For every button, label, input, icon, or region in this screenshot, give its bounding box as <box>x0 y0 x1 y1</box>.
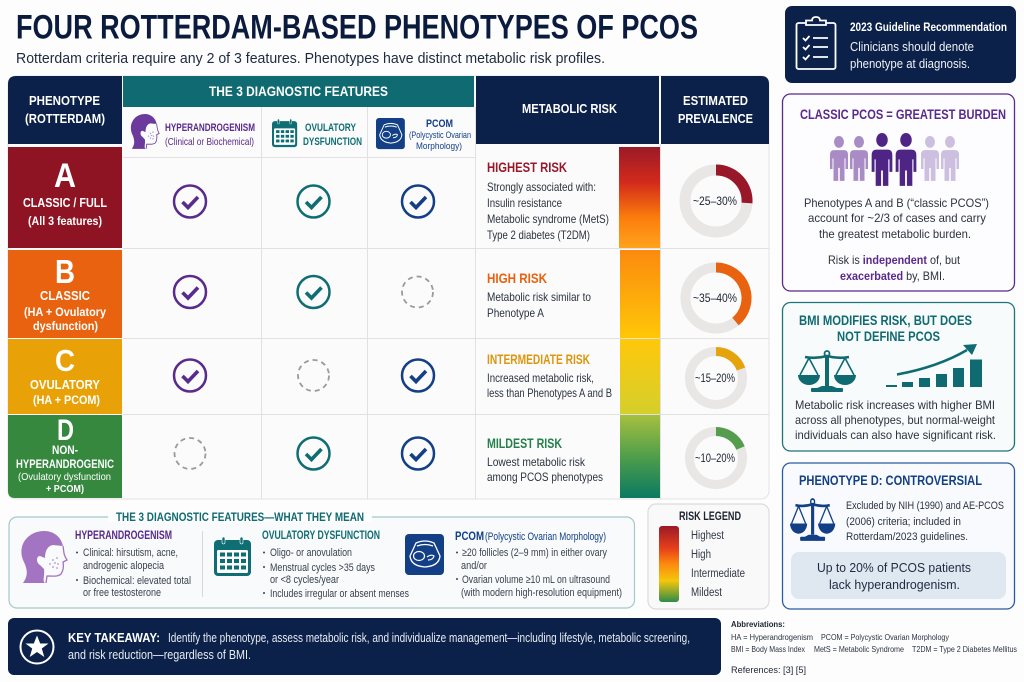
body text: Rotterdam/2023 guidelines. <box>846 531 968 543</box>
risk text: phenotype D: MILDEST RISK <box>487 435 562 451</box>
risk legend: Intermediate <box>691 568 745 580</box>
column header: ovulatory dysfunction: OVULATORY <box>305 122 356 134</box>
donut: phenotype D prevalence: ~10–20% <box>695 451 735 465</box>
text: ovulatory dysfunction: OVULATORY DYSFUNCTION <box>262 530 380 542</box>
body text: individuals can also have significant risk. <box>795 428 996 442</box>
risk text: phenotype B: HIGH RISK <box>487 270 547 286</box>
text: PCOM: PCOM <box>455 531 484 543</box>
text: hyperandrogenism: Biochemical: elevated total <box>83 575 191 587</box>
phenotype C label: (HA + PCOM) <box>33 393 100 407</box>
risk text: phenotype C: less than Phenotypes A and B <box>487 386 612 400</box>
donut: phenotype A prevalence <box>685 170 747 232</box>
phenotype A label: CLASSIC / FULL <box>23 195 107 210</box>
risk text: phenotype A: Insulin resistance <box>487 196 562 210</box>
chart: rising bars with arrow <box>886 344 982 387</box>
heading: BMI MODIFIES RISK, BUT DOES <box>799 313 972 328</box>
icon: ultrasound <box>405 534 444 575</box>
header: phenotype: PHENOTYPE <box>29 93 100 108</box>
header: phenotype <box>8 76 122 144</box>
phenotype B label: CLASSIC <box>40 289 90 303</box>
phenotype B label: (HA + Ovulatory <box>24 305 106 319</box>
title: FOUR ROTTERDAM-BASED PHENOTYPES OF PCOS <box>16 8 698 46</box>
panel: classic PCOS = greatest burden <box>782 94 1014 291</box>
phenotype C label <box>8 339 122 414</box>
body text <box>846 500 1004 543</box>
heading: PHENOTYPE D: CONTROVERSIAL <box>799 473 982 488</box>
phenotype C label: C <box>55 343 75 378</box>
text: ovulatory dysfunction: Oligo- or anovulation <box>270 547 352 559</box>
column header: ovulatory dysfunction <box>272 119 362 148</box>
body text: Metabolic risk increases with higher BMI <box>795 398 995 412</box>
body text: account for ~2/3 of cases and carry <box>808 211 986 225</box>
icon: scales <box>798 351 856 392</box>
phenotype A label: (All 3 features) <box>28 214 102 228</box>
icon: star <box>20 630 54 664</box>
panel: 2023 guideline recommendation: phenotype at diagnosis. <box>850 57 970 71</box>
text: PCOM: ≥20 follicles (2–9 mm) in either ovary <box>462 547 607 559</box>
text: PCOM: Ovarian volume ≥10 mL on ultrasound <box>462 574 610 586</box>
icon: calendar <box>214 537 251 576</box>
risk text: phenotype A: Strongly associated with: <box>487 180 596 194</box>
body text <box>804 196 989 241</box>
row D checks <box>174 438 434 470</box>
body text: Phenotypes A and B (“classic PCOS”) <box>804 196 989 210</box>
text: ovulatory dysfunction <box>262 530 409 600</box>
phenotype D label: D <box>57 414 74 447</box>
header: metabolic risk: METABOLIC RISK <box>522 101 618 116</box>
column header: ovulatory dysfunction: DYSFUNCTION <box>303 136 362 148</box>
risk text: phenotype B: Metabolic risk similar to <box>487 290 591 304</box>
column header: hyperandrogenism: (Clinical or Biochemical) <box>165 136 254 148</box>
phenotype A label <box>8 147 122 248</box>
risk text: phenotype B: Phenotype A <box>487 306 544 320</box>
header: estimated prevalence <box>661 76 769 144</box>
panel: BMI modifies risk <box>782 302 1014 451</box>
icon: ultrasound <box>376 118 405 149</box>
risk legend: Highest <box>691 530 725 542</box>
key takeaway banner: Identify the phenotype, assess metabolic risk, and individualize management—including lifestyle, metabolic screening, <box>168 631 690 645</box>
body text: (2006) criteria; included in <box>846 516 961 528</box>
text: PCOM: (with modern high-resolution equipment) <box>461 587 622 599</box>
text: hyperandrogenism: androgenic alopecia <box>83 560 165 572</box>
callout: up to 20%: Up to 20% of PCOS patients <box>817 560 971 575</box>
header: phenotype: (ROTTERDAM) <box>25 111 105 126</box>
text: PCOM <box>455 531 622 599</box>
phenotype B label: dysfunction) <box>33 319 98 333</box>
risk legend: Mildest <box>691 587 723 599</box>
column header: PCOM <box>376 118 471 152</box>
abbreviations <box>731 619 1017 654</box>
metabolic risk gradient bar <box>619 147 660 498</box>
text: ovulatory dysfunction: or <8 cycles/year <box>270 574 339 586</box>
row A checks <box>174 186 434 218</box>
column header: hyperandrogenism: HYPERANDROGENISM <box>165 122 255 134</box>
phenotype B label <box>8 250 122 338</box>
phenotype comparison table <box>8 76 769 499</box>
phenotype B label: B <box>55 253 75 290</box>
column header: PCOM: Morphology) <box>416 141 462 152</box>
row C checks <box>174 360 434 392</box>
risk text: phenotype A <box>487 159 609 242</box>
phenotype D label: (Ovulatory dysfunction <box>18 471 111 483</box>
callout: BMI independence: Risk is independent of, but <box>828 253 961 267</box>
icon: face with acne <box>131 114 159 149</box>
panel: phenotype D controversial <box>782 463 1014 609</box>
text: PCOM: (Polycystic Ovarian Morphology) <box>485 531 606 543</box>
callout: BMI independence <box>828 253 961 283</box>
icon: six people <box>830 133 959 186</box>
body text: across all phenotypes, but normal-weight <box>795 413 996 427</box>
abbreviations: BMI = Body Mass Index <box>731 645 805 654</box>
phenotype D label <box>8 414 122 498</box>
donut: phenotype B prevalence: ~35–40% <box>693 291 737 305</box>
body text <box>795 398 996 442</box>
risk legend: High <box>691 549 711 561</box>
phenotype D label: + PCOM) <box>46 484 84 495</box>
header: the 3 diagnostic features: THE 3 DIAGNOSTIC FEATURES <box>209 84 388 99</box>
abbreviations: PCOM = Polycystic Ovarian Morphology <box>821 633 949 642</box>
callout: BMI independence: exacerbated by, BMI. <box>840 269 945 283</box>
risk text: phenotype D <box>487 435 603 484</box>
phenotype D label: HYPERANDROGENIC <box>16 459 114 471</box>
panel: 2023 guideline recommendation <box>785 6 1016 83</box>
phenotype C label: OVULATORY <box>30 377 100 392</box>
risk text: phenotype C: INTERMEDIATE RISK <box>487 351 590 367</box>
header: estimated prevalence: ESTIMATED <box>683 93 748 108</box>
icon: face profile <box>21 531 67 583</box>
panel: 2023 guideline recommendation: Clinicians should denote <box>850 40 974 54</box>
risk text: phenotype C: Increased metabolic risk, <box>487 371 594 385</box>
column header: PCOM: PCOM <box>426 118 453 130</box>
abbreviations: Abbreviations: <box>731 619 785 629</box>
heading: NOT DEFINE PCOS <box>837 329 940 344</box>
risk text: phenotype D: among PCOS phenotypes <box>487 470 603 484</box>
icon: clipboard <box>796 17 836 69</box>
risk legend: RISK LEGEND <box>679 511 741 523</box>
text: PCOM: and/or <box>461 560 487 572</box>
column header: PCOM: (Polycystic Ovarian <box>409 130 471 141</box>
phenotype D label: NON- <box>52 445 78 457</box>
callout: up to 20% <box>791 552 1006 599</box>
donut: phenotype D prevalence <box>690 432 742 484</box>
risk legend <box>648 504 769 609</box>
body text: the greatest metabolic burden. <box>819 227 971 241</box>
abbreviations: HA = Hyperandrogenism <box>731 633 813 642</box>
abbreviations: MetS = Metabolic Syndrome <box>814 645 904 654</box>
references: References: [3] [5] <box>731 665 806 676</box>
donut: phenotype C prevalence: ~15–20% <box>695 371 735 385</box>
risk text: phenotype D: Lowest metabolic risk <box>487 455 586 469</box>
key takeaway banner <box>8 618 721 675</box>
column header: hyperandrogenism <box>131 114 255 149</box>
phenotype A label: A <box>54 157 76 195</box>
risk text: phenotype A: HIGHEST RISK <box>487 159 567 175</box>
text: hyperandrogenism: HYPERANDROGENISM <box>75 530 172 542</box>
header: metabolic risk <box>476 76 659 144</box>
risk text: phenotype C <box>487 351 612 400</box>
panel: what the features mean <box>9 510 634 608</box>
donut: phenotype C prevalence <box>690 351 742 404</box>
text: hyperandrogenism <box>75 530 191 599</box>
key takeaway banner: KEY TAKEAWAY: <box>68 630 160 645</box>
text: ovulatory dysfunction: Includes irregular or absent menses <box>270 588 409 600</box>
icon: scales <box>790 499 835 541</box>
heading: what they mean: THE 3 DIAGNOSTIC FEATURES—WHAT THEY MEAN <box>116 510 364 524</box>
risk text: phenotype A: Metabolic syndrome (MetS) <box>487 212 609 226</box>
feature check marks <box>174 186 434 470</box>
header: estimated prevalence: PREVALENCE <box>678 111 753 126</box>
table body background <box>8 76 769 499</box>
donut: phenotype A prevalence: ~25–30% <box>693 194 737 208</box>
row B checks <box>174 276 433 308</box>
icon: calendar <box>272 119 297 147</box>
key takeaway banner: and risk reduction—regardless of BMI. <box>68 648 251 662</box>
text: hyperandrogenism: Clinical: hirsutism, acne, <box>83 547 178 559</box>
text: ovulatory dysfunction: Menstrual cycles >35 days <box>270 562 375 574</box>
subtitle: Rotterdam criteria require any 2 of 3 features. Phenotypes have distinct metabolic risk profiles. <box>16 50 605 67</box>
callout: up to 20%: lack hyperandrogenism. <box>829 577 960 592</box>
donut: phenotype B prevalence <box>686 267 747 328</box>
risk text: phenotype A: Type 2 diabetes (T2DM) <box>487 228 590 242</box>
risk text: phenotype B <box>487 270 591 320</box>
heading <box>799 313 972 344</box>
text: hyperandrogenism: or free testosterone <box>83 587 161 599</box>
header: the 3 diagnostic features <box>123 76 474 107</box>
